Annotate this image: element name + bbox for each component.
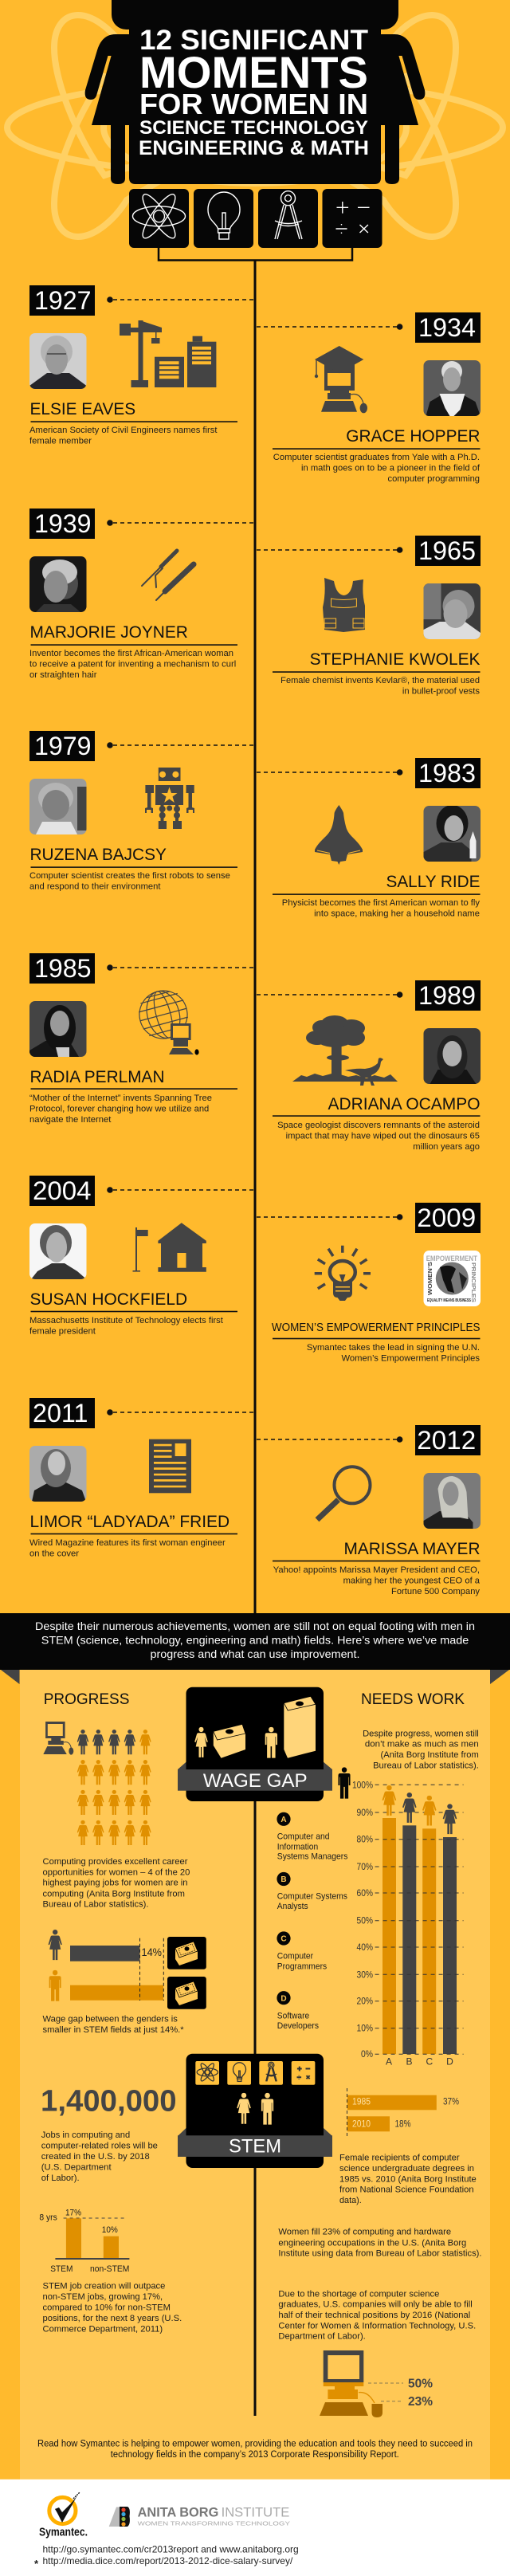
entry: 1965 Stephanie Kwolek bbox=[273, 536, 481, 697]
rule and description bbox=[273, 893, 480, 918]
text: female recipients: Female recipients of computer bbox=[339, 2154, 460, 2163]
year badge 1985 bbox=[29, 953, 113, 984]
title: 12 SIGNIFICANT bbox=[139, 25, 368, 56]
year badge 1927 bbox=[29, 285, 113, 316]
legend B bbox=[277, 1872, 347, 1911]
chart: women's pay as percent of men's: 60% bbox=[357, 1887, 373, 1899]
rule and description: or straighten hair bbox=[29, 670, 97, 680]
year badge 1934: 1934 bbox=[418, 313, 476, 342]
legend A: Computer and bbox=[277, 1832, 330, 1842]
name: Elsie Eaves: ELSIE EAVES bbox=[30, 400, 135, 418]
chart: STEM vs non-STEM job growth: 17% bbox=[65, 2208, 81, 2217]
panel: wage gap: WAGE GAP bbox=[203, 1770, 308, 1792]
year badge 1965: 1965 bbox=[418, 536, 476, 565]
logo: Anita Borg Institute: WOMEN TRANSFORMING TECHNOLOGY bbox=[138, 2522, 290, 2527]
panel: lower section background bbox=[1, 1669, 509, 2480]
entry: 1983 Sally Ride bbox=[273, 758, 481, 918]
year badge 1983 bbox=[397, 758, 481, 788]
icon: globe and computer bbox=[134, 985, 199, 1055]
text: graduate shortage: Department of Labor). bbox=[278, 2332, 366, 2342]
text: female recipients: 1985 vs. 2010 (Anita Borg Institute bbox=[339, 2174, 477, 2184]
text: jobs statement: computer-related roles will be bbox=[41, 2142, 158, 2151]
entry: 2011 Limor Fried bbox=[29, 1398, 237, 1559]
legend D: Developers bbox=[277, 2021, 319, 2031]
legend B: B bbox=[280, 1875, 287, 1884]
footnote URLs: http://go.symantec.com/cr2013report and www.anitaborg.org bbox=[43, 2544, 299, 2555]
center divider bbox=[253, 1801, 257, 2416]
text: jobs statement: created in the U.S. by 2018 bbox=[41, 2152, 150, 2162]
name: Stephanie Kwolek: STEPHANIE KWOLEK bbox=[310, 650, 480, 669]
logo: Anita Borg Institute: ANITA BORG bbox=[138, 2504, 218, 2519]
chart: STEM vs non-STEM job growth: 10% bbox=[102, 2225, 118, 2235]
chart: women's pay as percent of men's: 10% bbox=[357, 2023, 373, 2034]
heading: needs work: NEEDS WORK bbox=[361, 1691, 465, 1708]
STEM tiles bbox=[195, 2061, 315, 2085]
chart: female CS degree recipients: 18% bbox=[395, 2120, 411, 2130]
rule and description: into space, making her a household name bbox=[314, 909, 480, 918]
entry: 1934 Grace Hopper bbox=[273, 312, 481, 484]
photo: Elsie Eaves bbox=[29, 333, 86, 389]
name: Marjorie Joyner: MARJORIE JOYNER bbox=[30, 623, 188, 642]
text: needs work intro: (Anita Borg Institute from bbox=[381, 1750, 479, 1760]
photo: Marissa Mayer bbox=[424, 1473, 481, 1529]
chart: STEM vs non-STEM job growth: non-STEM bbox=[90, 2264, 129, 2274]
chart: gender wage gap bars bbox=[49, 1930, 206, 2009]
rule and description: to receive a patent for inventing a mechanism to curl bbox=[29, 660, 236, 670]
chart: computer 50% vs 23%: 23% bbox=[408, 2395, 433, 2409]
text: women fill 23%: engineering occupations in the U.S. (Anita Borg bbox=[278, 2238, 466, 2248]
year connectors bbox=[113, 300, 397, 1439]
rule and description bbox=[273, 1561, 481, 1596]
chart: female CS degree recipients bbox=[347, 2088, 459, 2138]
text: female recipients bbox=[339, 2154, 477, 2205]
text: jobs statement bbox=[41, 2130, 158, 2183]
icon: space shuttle bbox=[315, 805, 363, 865]
year badge 2012 bbox=[397, 1425, 481, 1455]
rule and description bbox=[29, 1533, 237, 1559]
name: Radia Perlman: RADIA PERLMAN bbox=[30, 1068, 164, 1086]
entry: 2009 Women's Empowerment Principles bbox=[272, 1203, 481, 1363]
logo: Women's Empowerment Principles bbox=[424, 1251, 481, 1306]
chart: female CS degree recipients: 1985 bbox=[352, 2098, 371, 2107]
entry: 1985 Radia Perlman bbox=[29, 953, 237, 1125]
rule and description: Wired Magazine features its first woman engineer bbox=[29, 1538, 226, 1548]
rule and description: Protocol, forever changing how we utilize and bbox=[29, 1105, 209, 1114]
text: women fill 23% bbox=[278, 2228, 481, 2259]
background atom bbox=[7, 15, 503, 237]
text: jobs statement: (U.S. Department bbox=[41, 2163, 112, 2173]
legend C: Computer bbox=[277, 1952, 313, 1961]
footnote URLs bbox=[34, 2544, 299, 2570]
text: computing opportunities: computing (Anita Borg Institute from bbox=[43, 1889, 185, 1899]
text: computing opportunities: opportunities for women – 4 of the 20 bbox=[43, 1867, 190, 1877]
statistic: 1,400,000: 1,400,000 bbox=[41, 2084, 177, 2118]
legend C: Programmers bbox=[277, 1961, 328, 1971]
panel: wage gap bbox=[178, 1687, 332, 1801]
rule and description: navigate the Internet bbox=[29, 1115, 111, 1125]
text: jobs statement: Jobs in computing and bbox=[41, 2130, 130, 2140]
text: STEM job creation: positions, for the next 8 years (U.S. bbox=[43, 2314, 182, 2323]
text: graduate shortage bbox=[278, 2289, 476, 2342]
rule and description: on the cover bbox=[29, 1549, 79, 1559]
year badge 2004: 2004 bbox=[33, 1176, 91, 1205]
wage gap illustration bbox=[194, 1696, 316, 1758]
chart: STEM vs non-STEM job growth: 8 yrs bbox=[39, 2213, 57, 2223]
year badge 1989: 1989 bbox=[418, 981, 476, 1010]
logo: Symantec: Symantec. bbox=[39, 2526, 88, 2539]
text: graduate shortage: Due to the shortage of computer science bbox=[278, 2289, 439, 2299]
rule and description: and respond to their environment bbox=[29, 882, 160, 891]
name: Adriana Ocampo: ADRIANA OCAMPO bbox=[328, 1095, 480, 1113]
rule and description: Symantec takes the lead in signing the U.N. bbox=[307, 1343, 480, 1353]
footnote URLs: http://media.dice.com/report/2013-2012-dice-salary-survey/ bbox=[43, 2555, 293, 2566]
year badge 1985: 1985 bbox=[34, 954, 91, 983]
banner: intro statement: progress and what can use improvement. bbox=[150, 1647, 360, 1660]
chart: women's pay as percent of men's: 40% bbox=[357, 1942, 373, 1953]
chart: female CS degree recipients: 2010 bbox=[352, 2120, 371, 2130]
banner: intro statement: STEM (science, technology, engineering and math) fields. Here’s where we’ve made bbox=[41, 1634, 469, 1647]
entry: 1979 Ruzena Bajcsy bbox=[29, 731, 237, 891]
chart: women's pay as percent of men's bbox=[352, 1779, 464, 2067]
legend A: Information bbox=[277, 1842, 318, 1852]
header figure: two women silhouette bbox=[85, 0, 425, 184]
chart: female CS degree recipients: 37% bbox=[443, 2098, 459, 2107]
legend B: Computer Systems bbox=[277, 1892, 347, 1902]
legend D bbox=[277, 1991, 319, 2031]
text: STEM job creation: Commerce Department, 2011) bbox=[43, 2325, 163, 2334]
chart: women's pay as percent of men's: D bbox=[446, 2056, 453, 2067]
text: STEM job creation bbox=[43, 2282, 182, 2334]
chart: women's pay as percent of men's: 0% bbox=[361, 2048, 373, 2060]
chart: women's pay as percent of men's: 90% bbox=[357, 1807, 373, 1818]
heading: progress: PROGRESS bbox=[44, 1691, 129, 1708]
rule and description: Massachusetts Institute of Technology elects first bbox=[29, 1316, 223, 1325]
text: read how Symantec: Read how Symantec is helping to empower women, providing the education and tools they need to succeed in bbox=[37, 2439, 473, 2448]
rule and description: Female chemist invents Kevlar®, the material used bbox=[280, 676, 480, 685]
year badge 1927: 1927 bbox=[34, 286, 91, 315]
photo: Marjorie Joyner bbox=[29, 556, 86, 612]
title: ENGINEERING & MATH bbox=[139, 137, 369, 159]
pictogram: 4 of 20 women bbox=[77, 1730, 151, 1845]
rule and description bbox=[273, 671, 480, 697]
chart: computer 50% vs 23% bbox=[320, 2350, 433, 2417]
rule and description bbox=[273, 1115, 480, 1152]
rule and description: in math goes on to be a pioneer in the field of bbox=[301, 464, 481, 473]
photo: Ruzena Bajcsy bbox=[29, 779, 87, 834]
year badge 2004 bbox=[29, 1176, 113, 1206]
rule and description bbox=[29, 421, 237, 446]
year badge 2009 bbox=[397, 1203, 481, 1233]
rule and description: million years ago bbox=[413, 1142, 480, 1152]
icon: crane and buildings bbox=[120, 320, 216, 387]
icon: computer bbox=[43, 1722, 73, 1755]
entry: 1927 Elsie Eaves bbox=[29, 285, 237, 446]
icon: hair curling irons bbox=[142, 551, 194, 600]
chart: women's pay as percent of men's: 50% bbox=[357, 1915, 373, 1926]
logo: Anita Borg Institute: INSTITUTE bbox=[222, 2504, 289, 2519]
footnote URLs: * bbox=[34, 2558, 39, 2570]
rule and description: Women’s Empowerment Principles bbox=[341, 1353, 481, 1363]
rule and description: computer programming bbox=[387, 474, 480, 484]
legend D: D bbox=[280, 1994, 287, 2003]
icon: magazine bbox=[149, 1439, 191, 1493]
photo: Susan Hockfield bbox=[29, 1223, 86, 1279]
text: women fill 23%: Institute using data from Bureau of Labor statistics). bbox=[278, 2249, 481, 2259]
photo: Grace Hopper bbox=[424, 360, 481, 416]
entry: 1939 Marjorie Joyner bbox=[29, 509, 237, 680]
rule and description bbox=[29, 1311, 237, 1336]
title: MOMENTS bbox=[139, 47, 368, 97]
legend C bbox=[277, 1931, 328, 1971]
icon: robot bbox=[145, 768, 194, 829]
rule and description: female president bbox=[29, 1326, 96, 1336]
title bbox=[139, 25, 369, 159]
text: female recipients: data). bbox=[339, 2196, 362, 2205]
banner: intro statement bbox=[0, 1613, 510, 1670]
photo: Adriana Ocampo bbox=[424, 1028, 481, 1084]
logo: Anita Borg Institute bbox=[109, 2504, 290, 2527]
text: read how Symantec bbox=[37, 2439, 473, 2460]
legend: occupations A-D bbox=[277, 1812, 348, 2031]
year badge 2009: 2009 bbox=[417, 1204, 476, 1232]
text: read how Symantec: technology fields in the company’s 2013 Corporate Responsibility Report. bbox=[111, 2450, 399, 2460]
name: Women's Empowerment Principles: WOMEN’S EMPOWERMENT PRINCIPLES bbox=[272, 1321, 480, 1334]
icon: graduation cap on computer bbox=[315, 346, 367, 413]
icon: bullet-proof vest bbox=[323, 578, 365, 632]
panel: STEM: STEM bbox=[229, 2136, 281, 2158]
photo: Stephanie Kwolek bbox=[424, 583, 481, 639]
text: graduate shortage: graduates, U.S. companies will only be able to fill bbox=[278, 2300, 473, 2310]
legend D: Software bbox=[277, 2012, 309, 2021]
name: Grace Hopper: GRACE HOPPER bbox=[346, 427, 480, 446]
text: STEM job creation: non-STEM jobs, growing 17%, bbox=[43, 2292, 163, 2302]
entry: 1989 Adriana Ocampo bbox=[273, 980, 481, 1152]
rule and description bbox=[273, 1338, 481, 1363]
chart: gender wage gap bars: 14% bbox=[142, 1946, 162, 1958]
year badge 1983: 1983 bbox=[418, 759, 476, 787]
STEM icon boxes bbox=[129, 189, 382, 248]
entry: 2012 Marissa Mayer bbox=[273, 1425, 481, 1596]
logo: Women's Empowerment Principles: PRINCIPLES bbox=[470, 1262, 477, 1302]
text: jobs statement: of Labor). bbox=[41, 2174, 80, 2183]
logo: Women's Empowerment Principles: WOMEN’S bbox=[426, 1262, 434, 1295]
name: Marissa Mayer: MARISSA MAYER bbox=[344, 1540, 480, 1558]
name: Ruzena Bajcsy: RUZENA BAJCSY bbox=[30, 846, 167, 864]
icon: man benchmark bbox=[338, 1767, 351, 1799]
text: needs work intro: don’t make as much as men bbox=[365, 1740, 479, 1749]
text: needs work intro bbox=[363, 1729, 479, 1770]
text: STEM job creation: compared to 10% for non-STEM bbox=[43, 2303, 171, 2313]
rule and description: Fortune 500 Company bbox=[391, 1587, 481, 1596]
chart: women's pay as percent of men's: 100% bbox=[352, 1779, 373, 1790]
rule and description bbox=[29, 866, 237, 891]
rule and description: Computer scientist graduates from Yale with a Ph.D. bbox=[273, 453, 480, 462]
photo: Radia Perlman bbox=[29, 1001, 86, 1057]
rule and description: in bullet-proof vests bbox=[402, 687, 480, 697]
chart: computer 50% vs 23%: 50% bbox=[408, 2377, 433, 2390]
chart: women's pay as percent of men's: 20% bbox=[357, 1996, 373, 2007]
rule and description bbox=[29, 644, 237, 680]
rule and description: Physicist becomes the first American woman to fly bbox=[282, 898, 480, 908]
chart: women's pay as percent of men's: A bbox=[386, 2056, 392, 2067]
photo: Limor Fried bbox=[29, 1446, 86, 1502]
rule and description bbox=[29, 1088, 237, 1125]
text: women fill 23%: Women fill 23% of computing and hardware bbox=[278, 2228, 451, 2237]
rule and description: impact that may have wiped out the dinosaurs 65 bbox=[286, 1132, 480, 1141]
legend C: C bbox=[280, 1935, 287, 1944]
text: computing opportunities bbox=[43, 1857, 190, 1910]
text: computing opportunities: Computing provides excellent career bbox=[43, 1857, 188, 1867]
legend B: Analysts bbox=[277, 1902, 308, 1911]
icon: magnifying glass bbox=[317, 1467, 370, 1520]
panel: STEM bbox=[178, 2054, 332, 2168]
title: FOR WOMEN IN bbox=[139, 88, 368, 120]
rule and description bbox=[273, 448, 481, 484]
rule and description: Yahoo! appoints Marissa Mayer President and CEO, bbox=[273, 1565, 480, 1575]
chart: STEM vs non-STEM job growth bbox=[39, 2208, 129, 2274]
rule and description: American Society of Civil Engineers names first bbox=[29, 426, 217, 435]
year badge 2011: 2011 bbox=[33, 1399, 88, 1427]
icon: mushroom cloud and dinosaur bbox=[292, 1015, 398, 1086]
year badge 1989 bbox=[397, 980, 481, 1011]
year badge 1939 bbox=[29, 509, 113, 539]
name: Sally Ride: SALLY RIDE bbox=[386, 873, 480, 891]
year badge 2012: 2012 bbox=[417, 1426, 476, 1455]
rule and description: making her the youngest CEO of a bbox=[343, 1577, 481, 1586]
text: female recipients: from National Science Foundation bbox=[339, 2185, 474, 2195]
rule and description: Space geologist discovers remnants of the asteroid bbox=[277, 1121, 480, 1130]
name: Limor Fried: LIMOR “LADYADA” FRIED bbox=[30, 1513, 230, 1531]
text: graduate shortage: Center for Women & Information Technology, U.S. bbox=[278, 2321, 476, 2331]
chart: STEM vs non-STEM job growth: STEM bbox=[50, 2264, 73, 2274]
text: computing opportunities: highest paying jobs for women are in bbox=[43, 1879, 188, 1888]
logo: Symantec bbox=[39, 2492, 88, 2539]
year badge 1965 bbox=[397, 536, 481, 566]
legend A: Systems Managers bbox=[277, 1852, 348, 1862]
legend A: A bbox=[280, 1816, 287, 1824]
photo: Sally Ride bbox=[424, 805, 481, 862]
rule and description: “Mother of the Internet” invents Spanning Tree bbox=[29, 1094, 212, 1103]
name: Susan Hockfield: SUSAN HOCKFIELD bbox=[30, 1290, 187, 1309]
text: wage gap note: smaller in STEM fields at just 14%.* bbox=[43, 2025, 184, 2035]
year badge 1939: 1939 bbox=[34, 509, 91, 538]
timeline spine bbox=[159, 248, 352, 1618]
text: needs work intro: Bureau of Labor statistics). bbox=[373, 1761, 479, 1770]
footer background bbox=[0, 2480, 510, 2576]
year badge 2011 bbox=[29, 1398, 113, 1428]
text: wage gap note bbox=[43, 2015, 184, 2035]
text: female recipients: science undergraduate degrees in bbox=[339, 2164, 474, 2174]
rule and description: Computer scientist creates the first robots to sense bbox=[29, 871, 230, 881]
year badge 1979: 1979 bbox=[34, 732, 91, 760]
chart: women's pay as percent of men's: B bbox=[406, 2056, 413, 2067]
icon: light bulb with rays bbox=[315, 1246, 371, 1301]
banner: intro statement: Despite their numerous achievements, women are still not on equal footing with men in bbox=[35, 1620, 475, 1632]
chart: women's pay as percent of men's: 70% bbox=[357, 1861, 373, 1872]
text: graduate shortage: half of their technical positions by 2016 (National bbox=[278, 2311, 470, 2320]
legend A bbox=[277, 1812, 348, 1862]
rule and description: female member bbox=[29, 437, 92, 446]
logo: Women's Empowerment Principles: EQUALITY MEANS BUSINESS bbox=[427, 1298, 472, 1303]
text: computing opportunities: Bureau of Labor statistics). bbox=[43, 1900, 148, 1910]
entry: 2004 Susan Hockfield bbox=[29, 1176, 237, 1336]
chart: women's pay as percent of men's: 80% bbox=[357, 1833, 373, 1844]
year badge 1934 bbox=[397, 312, 481, 343]
chart: women's pay as percent of men's: C bbox=[426, 2056, 433, 2067]
rule and description: Inventor becomes the first African-American woman bbox=[29, 649, 233, 658]
text: STEM job creation: STEM job creation will outpace bbox=[43, 2282, 165, 2291]
year badge 1979 bbox=[29, 731, 113, 761]
text: wage gap note: Wage gap between the genders is bbox=[43, 2015, 178, 2024]
text: needs work intro: Despite progress, women still bbox=[363, 1729, 479, 1738]
title: SCIENCE TECHNOLOGY bbox=[139, 117, 368, 139]
icon: flag and house bbox=[132, 1223, 206, 1272]
logo: Women's Empowerment Principles: EMPOWERMENT bbox=[426, 1255, 477, 1262]
chart: women's pay as percent of men's: 30% bbox=[357, 1969, 373, 1980]
